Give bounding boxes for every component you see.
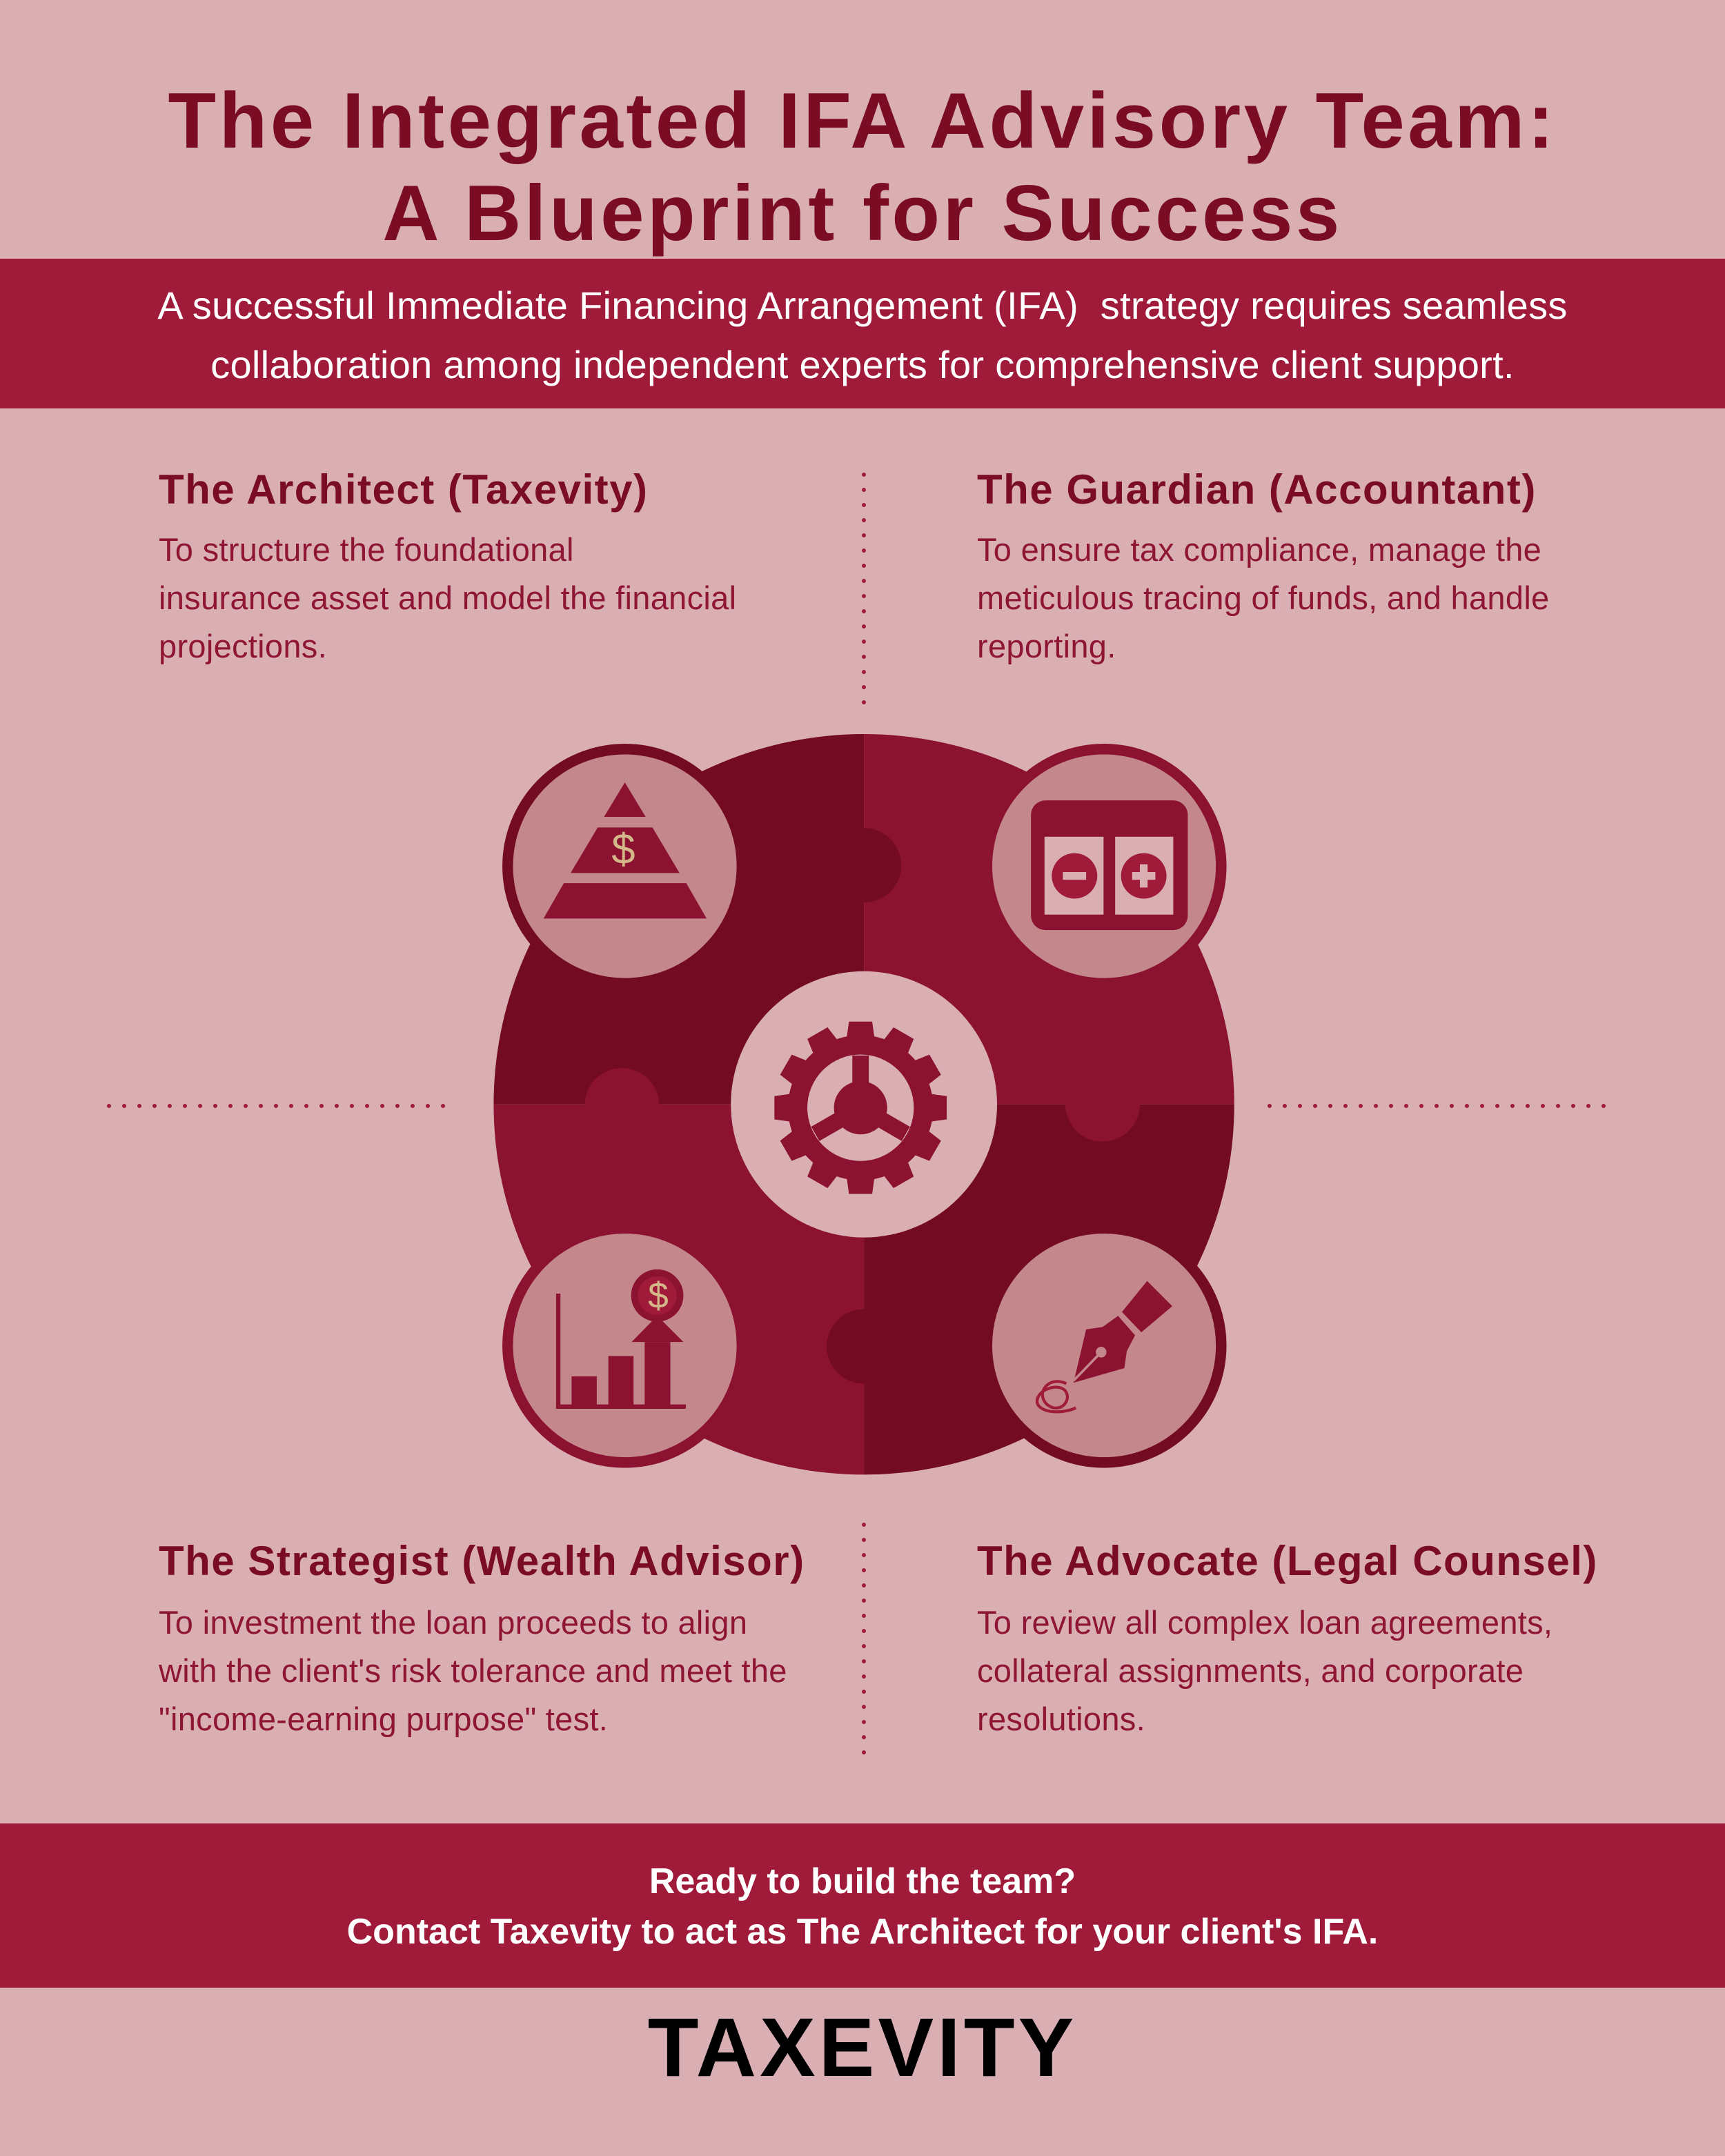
text: architect: To structure the foundational <box>159 531 574 568</box>
text: advocate <box>977 1604 1552 1737</box>
center circle with gear <box>731 971 997 1238</box>
CTA text: Contact Taxevity to act as The Architect for your client's IFA. <box>347 1912 1378 1952</box>
icon: fountain pen <box>987 1228 1221 1463</box>
text: guardian <box>977 531 1550 664</box>
heading: strategist: The Strategist (Wealth Advisor) <box>159 1538 805 1584</box>
text: strategist: with the client's risk tolerance and meet the <box>159 1652 787 1689</box>
text: advocate: collateral assignments, and corporate <box>977 1652 1524 1689</box>
icon: calculator <box>987 749 1221 983</box>
title <box>168 77 1557 257</box>
panel: strategist <box>159 1538 805 1737</box>
footer CTA band <box>0 1823 1725 1988</box>
text: guardian: reporting. <box>977 628 1116 664</box>
title: The Integrated IFA Advisory Team: <box>168 77 1557 165</box>
intro text: collaboration among independent experts for comprehensive client support. <box>210 343 1515 386</box>
heading: guardian: The Guardian (Accountant) <box>977 466 1537 513</box>
heading: advocate: The Advocate (Legal Counsel) <box>977 1538 1598 1584</box>
icon: growth chart <box>508 1228 742 1463</box>
text: advocate: resolutions. <box>977 1701 1145 1737</box>
panel: architect <box>159 466 736 664</box>
text: guardian: meticulous tracing of funds, and handle <box>977 580 1550 616</box>
intro band <box>0 259 1725 408</box>
icon: growth chart: $ <box>648 1276 669 1316</box>
text: guardian: To ensure tax compliance, manage the <box>977 531 1541 568</box>
panel: guardian <box>977 466 1550 664</box>
intro text: A successful Immediate Financing Arrangement (IFA) strategy requires seamless <box>157 284 1568 327</box>
title: A Blueprint for Success <box>382 170 1343 257</box>
text: strategist: To investment the loan proceeds to align <box>159 1604 747 1641</box>
text: architect: insurance asset and model the financial <box>159 580 736 616</box>
icon: pyramid <box>508 749 742 983</box>
heading: architect: The Architect (Taxevity) <box>159 466 649 513</box>
text: strategist: "income-earning purpose" test. <box>159 1701 608 1737</box>
panel: advocate <box>977 1538 1598 1737</box>
text: strategist <box>159 1604 787 1737</box>
CTA text: Ready to build the team? <box>649 1861 1076 1901</box>
text: advocate: To review all complex loan agreements, <box>977 1604 1552 1641</box>
intro text <box>157 284 1568 386</box>
logo: TAXEVITY <box>648 2000 1077 2094</box>
text: architect <box>159 531 736 664</box>
icon: pyramid: $ <box>611 826 635 873</box>
text: architect: projections. <box>159 628 327 664</box>
puzzle graphic <box>493 734 1234 1475</box>
CTA text <box>347 1861 1378 1952</box>
